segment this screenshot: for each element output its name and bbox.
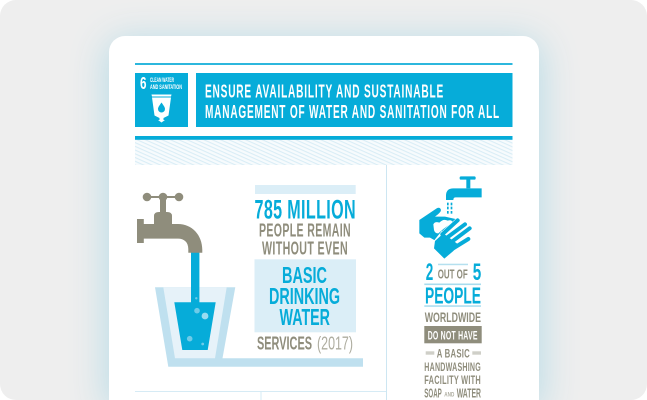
- goal number: 6: [140, 73, 147, 93]
- goal 6 icon tile: [135, 73, 188, 127]
- statistic: 2 out of 5 people: AND: [444, 392, 455, 398]
- do not have label: [424, 326, 482, 343]
- icon: water cup with drop: [152, 94, 172, 122]
- statistic: 2 out of 5 people: 5: [473, 259, 481, 286]
- statistic: 785 million: PEOPLE REMAIN: [259, 221, 351, 241]
- water stream: [191, 252, 199, 304]
- statistic: 785 million: DRINKING: [269, 283, 340, 309]
- statistic: 2 out of 5 people: SOAP: [424, 385, 442, 400]
- statistic: 785 million: SERVICES: [257, 334, 312, 354]
- statistic: 785 million: 785 MILLION: [254, 194, 356, 224]
- statistic: 785 million: BASIC: [282, 262, 327, 288]
- statistic: 785 million: WATER: [280, 304, 330, 330]
- goal name: [150, 77, 182, 91]
- statistic: 785 million: WITHOUT EVEN: [262, 239, 348, 259]
- statistic: 2 out of 5 people: FACILITY WITH: [424, 373, 481, 387]
- statistic: 2 out of 5 people: OUT OF: [438, 266, 468, 281]
- soap: [433, 220, 453, 233]
- white card: [109, 36, 539, 400]
- icon: tap: [137, 193, 202, 253]
- statistic: 2 out of 5 people: [424, 259, 482, 400]
- statistic: 785 million: (2017): [317, 334, 353, 354]
- statistic: 2 out of 5 people: HANDWASHING: [424, 360, 481, 374]
- icon: glass of water: [155, 252, 363, 367]
- goal name: AND SANITATION: [150, 84, 182, 91]
- title banner: ENSURE AVAILABILITY AND SUSTAINABLE: [205, 81, 444, 102]
- statistic: 2 out of 5 people: PEOPLE: [425, 282, 481, 308]
- statistic: 2 out of 5 people: WATER: [457, 385, 481, 400]
- statistic: 785 million: [254, 185, 356, 354]
- tap: [446, 176, 482, 200]
- title banner: [196, 73, 512, 127]
- statistic: 2 out of 5 people: WORLDWIDE: [425, 310, 481, 325]
- statistic: 2 out of 5 people: 2: [426, 259, 433, 286]
- goal name: CLEAN WATER: [150, 77, 174, 84]
- do not have label: DO NOT HAVE: [428, 328, 478, 342]
- water drops: [447, 203, 452, 214]
- highlight box: [254, 259, 356, 332]
- icon: handwashing: [419, 176, 482, 260]
- statistic: 2 out of 5 people: A BASIC: [437, 346, 470, 360]
- bubbles: [187, 297, 208, 345]
- back hand: [419, 208, 460, 242]
- front hand: [433, 220, 470, 260]
